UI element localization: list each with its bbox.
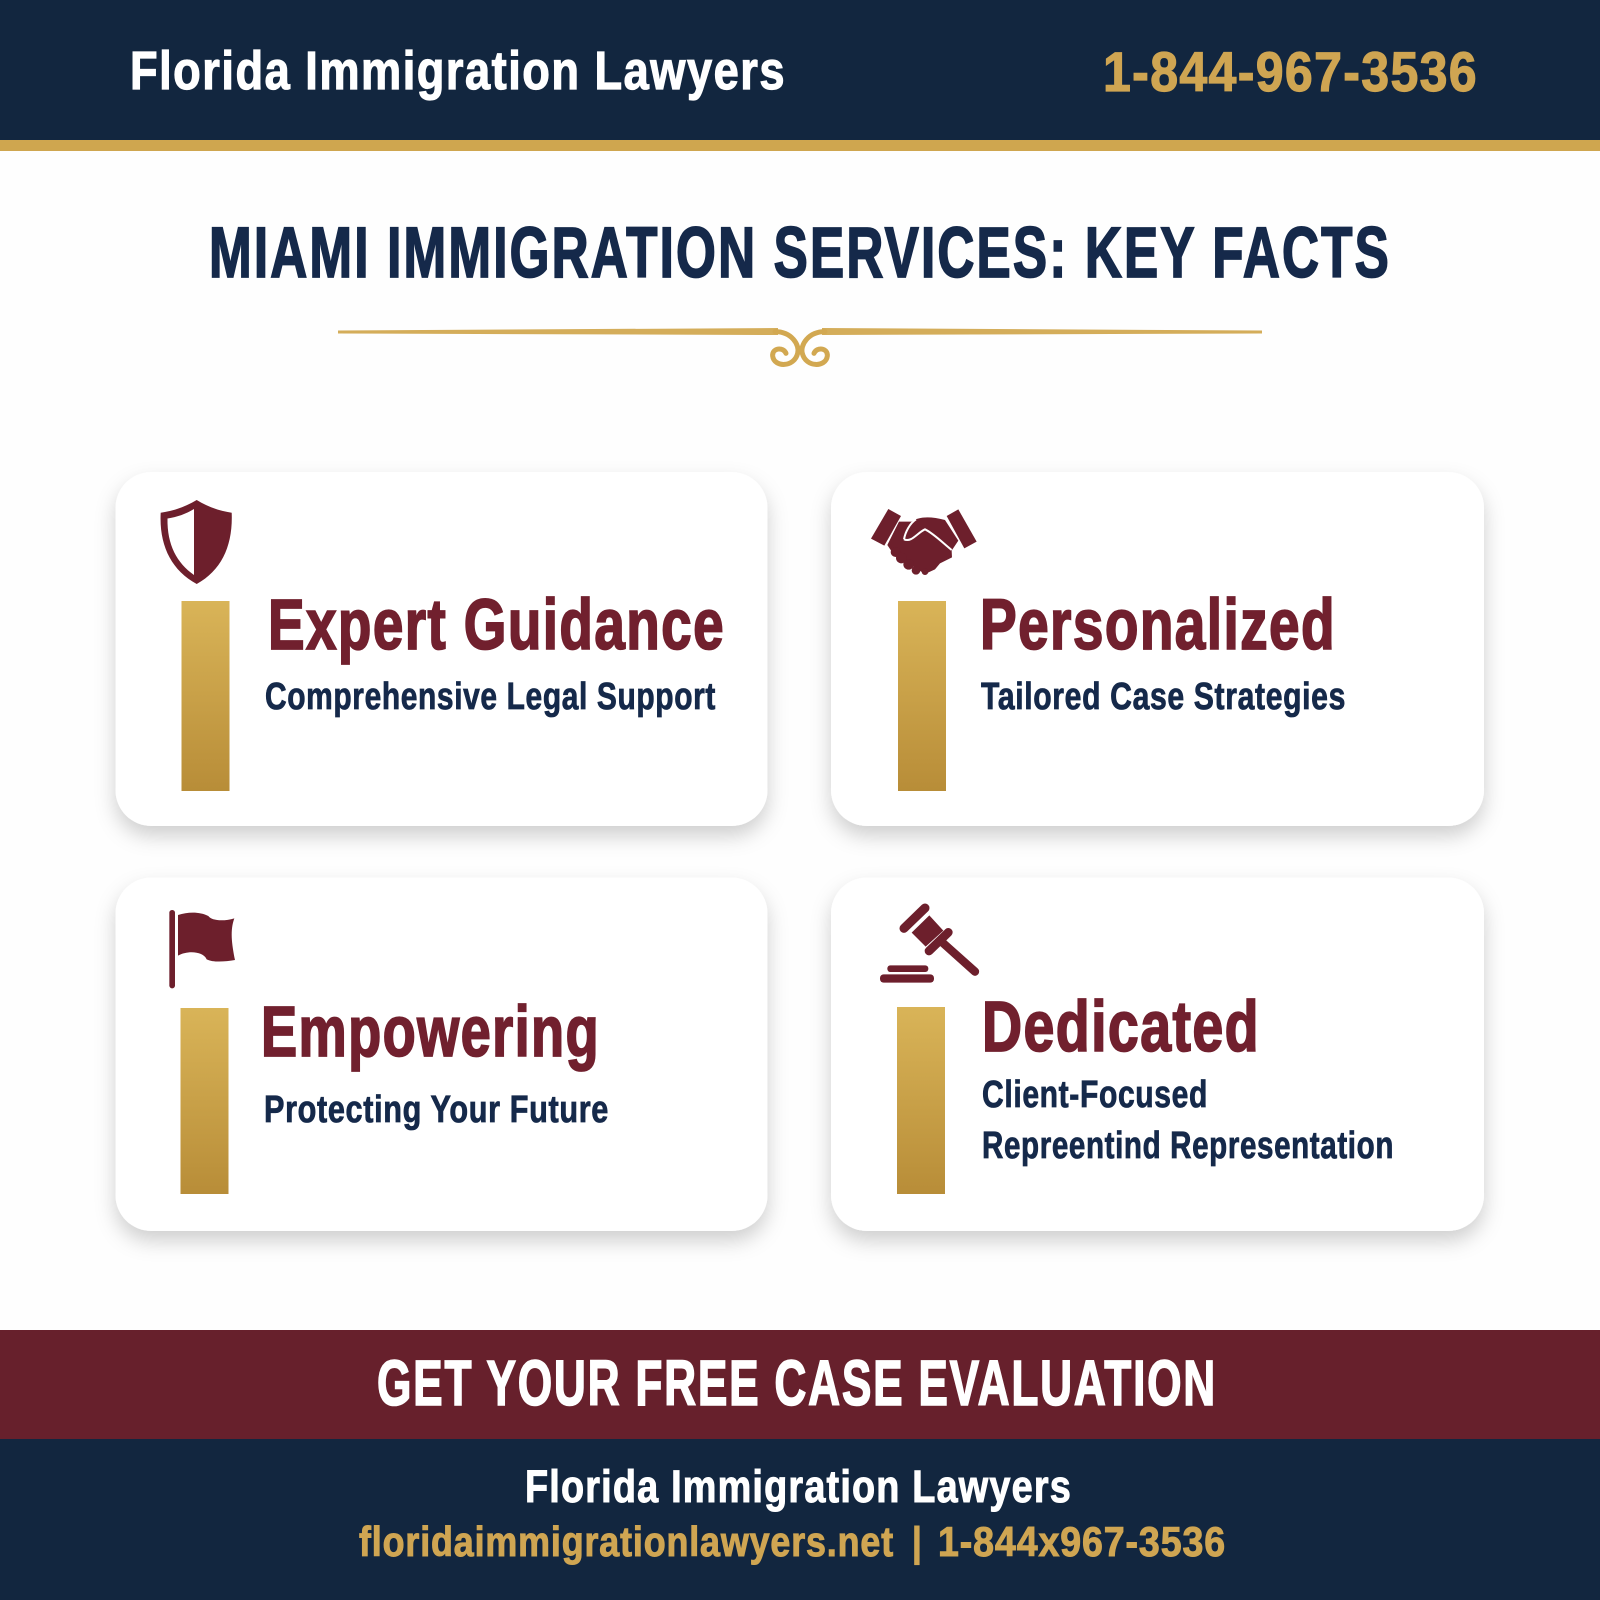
footer firm name: Florida Immigration Lawyers	[525, 1461, 1072, 1512]
footer contact line: floridaimmigrationlawyers.net	[359, 1518, 894, 1565]
gold bar	[898, 601, 946, 791]
subheading: Tailored Case Strategies	[981, 676, 1346, 718]
gold bar	[897, 1007, 945, 1194]
footer contact line: |	[911, 1518, 923, 1566]
ornamental divider	[338, 328, 1262, 364]
heading: Personalized	[980, 586, 1336, 665]
panel: Dedicated	[831, 878, 1484, 1231]
icon: shield	[161, 500, 232, 584]
subheading line 2: Repreentind Representation	[982, 1125, 1394, 1167]
header phone number: 1-844-967-3536	[1103, 40, 1478, 103]
heading: Expert Guidance	[268, 586, 725, 665]
header firm name: Florida Immigration Lawyers	[130, 41, 786, 101]
subheading line 1: Client-Focused	[982, 1074, 1208, 1116]
panel: Expert Guidance	[116, 472, 768, 826]
call to action band	[0, 1330, 1600, 1440]
subheading: Comprehensive Legal Support	[265, 676, 716, 718]
icon: flag	[169, 910, 235, 988]
panel: Personalized	[831, 472, 1484, 826]
gold bar	[180, 1008, 228, 1194]
icon: handshake	[871, 509, 977, 575]
gold bar	[182, 601, 230, 791]
heading: Dedicated	[982, 988, 1260, 1067]
footer band	[0, 1439, 1600, 1600]
header band	[0, 0, 1600, 151]
panel: Empowering	[116, 878, 768, 1231]
footer contact line: 1-844x967-3536	[938, 1518, 1226, 1565]
icon: gavel	[880, 908, 975, 983]
call to action text: GET YOUR FREE CASE EVALUATION	[377, 1347, 1217, 1419]
heading: Empowering	[261, 993, 600, 1072]
subheading: Protecting Your Future	[264, 1089, 609, 1131]
